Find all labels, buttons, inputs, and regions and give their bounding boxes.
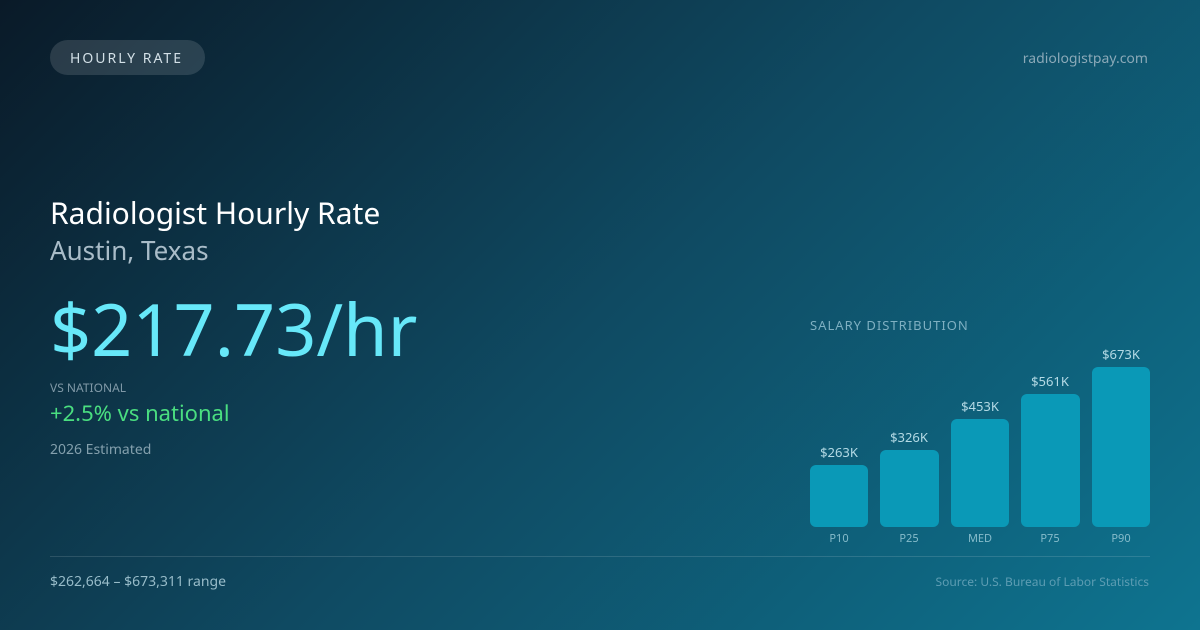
P75 bar — [1021, 394, 1080, 527]
P10 value: $263K — [820, 443, 858, 461]
category pill: HOURLY RATE — [70, 49, 183, 68]
salary range: $262,664 – $673,311 range — [50, 572, 226, 591]
P90 bar — [1092, 367, 1150, 527]
median label: MED — [968, 531, 992, 546]
category pill — [50, 40, 205, 75]
comparison label: VS NATIONAL — [50, 379, 126, 396]
year note: 2026 Estimated — [50, 440, 151, 459]
P75 value: $561K — [1031, 372, 1069, 390]
P75 label: P75 — [1040, 531, 1060, 546]
P10 bar — [810, 465, 868, 527]
comparison value: +2.5% vs national — [50, 398, 230, 428]
P25 value: $326K — [890, 428, 928, 446]
chart heading: SALARY DISTRIBUTION — [810, 316, 969, 334]
site name: radiologistpay.com — [1023, 49, 1148, 68]
title: Radiologist Hourly Rate — [50, 192, 380, 233]
P90 value: $673K — [1102, 345, 1140, 363]
P25 label: P25 — [899, 531, 919, 546]
source: Source: U.S. Bureau of Labor Statistics — [936, 573, 1149, 590]
P90 label: P90 — [1111, 531, 1131, 546]
location: Austin, Texas — [50, 232, 209, 268]
salary distribution chart — [810, 316, 1150, 546]
median value: $453K — [961, 397, 999, 415]
P25 bar — [880, 450, 939, 527]
median bar — [951, 419, 1009, 527]
hourly rate value: $217.73/hr — [50, 280, 417, 378]
P10 label: P10 — [829, 531, 849, 546]
